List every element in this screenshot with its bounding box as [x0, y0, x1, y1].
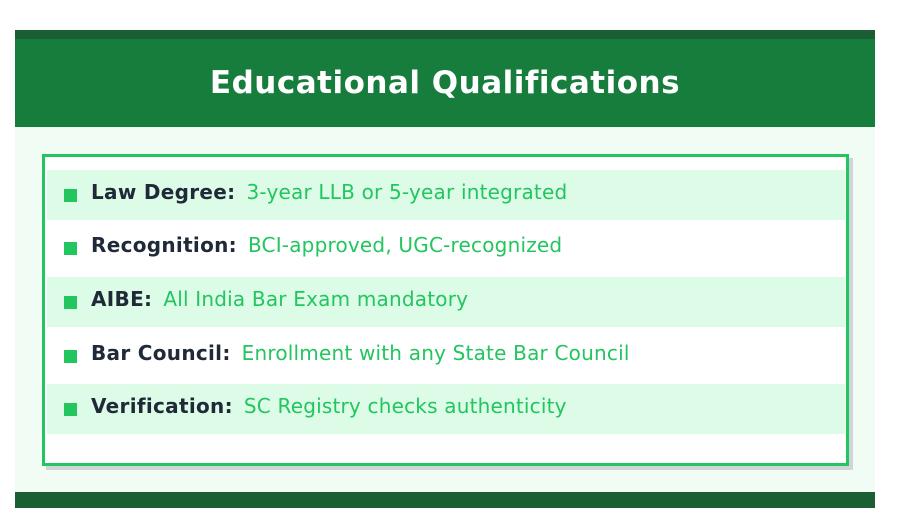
row: bar council: Bar Council: Enrollment with any State Bar Council [91, 341, 630, 365]
row: recognition: Recognition: BCI-approved, UGC-recognized [91, 233, 562, 257]
header [15, 39, 875, 127]
list box [42, 154, 849, 466]
row: AIBE [47, 277, 845, 327]
body panel [15, 127, 875, 492]
row: law degree: Law Degree: 3-year LLB or 5-year integrated [91, 180, 567, 204]
row: bar council [47, 331, 845, 381]
row: verification [47, 384, 845, 434]
top strip [15, 30, 875, 40]
row: law degree [47, 170, 845, 220]
header: Educational Qualifications [210, 65, 680, 101]
bottom bar [15, 492, 875, 508]
row: verification: Verification: SC Registry checks authenticity [91, 394, 567, 418]
row: AIBE: AIBE: All India Bar Exam mandatory [91, 287, 468, 311]
row: recognition [47, 223, 845, 273]
